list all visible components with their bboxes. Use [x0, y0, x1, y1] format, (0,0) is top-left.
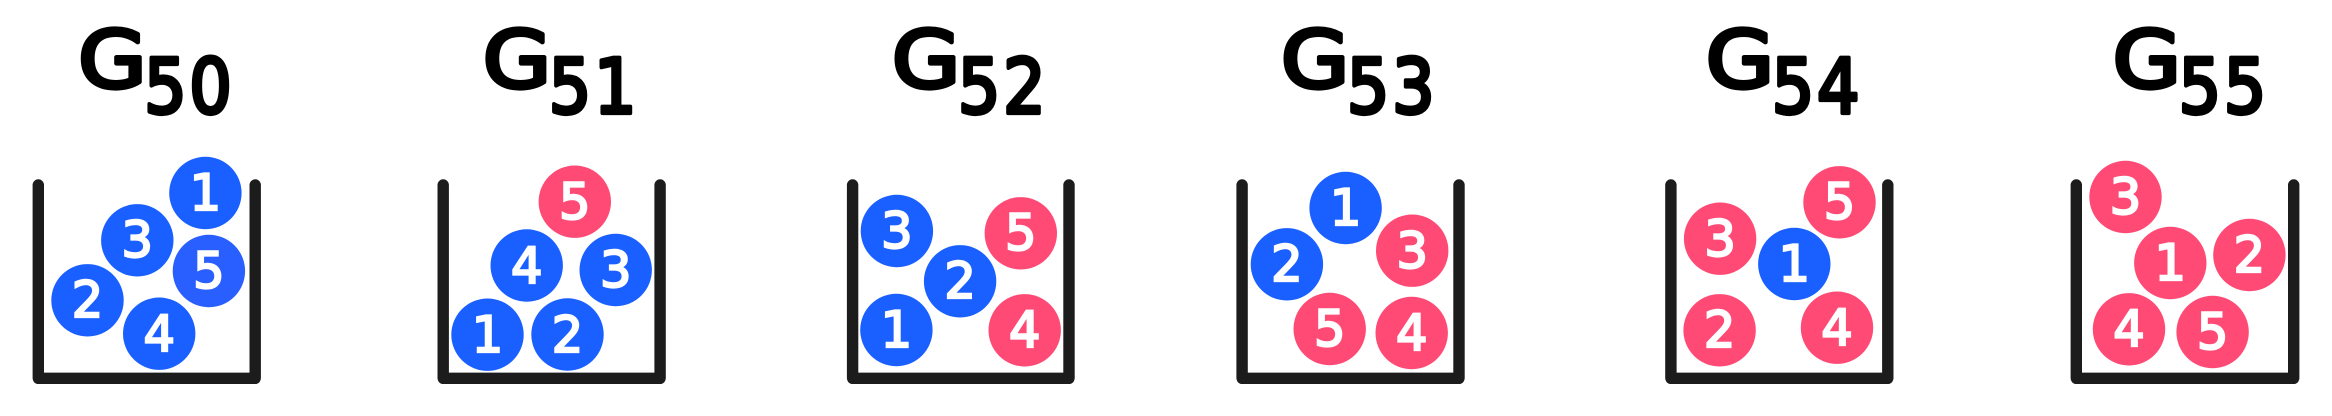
title: G53	[1281, 14, 1437, 131]
ball: blue 1	[169, 157, 242, 229]
ball: blue 1: 1	[472, 306, 503, 364]
panel: G52 group	[853, 14, 1069, 378]
ball: blue 2	[531, 298, 604, 371]
title: G55: 55	[2179, 43, 2269, 131]
ball: pink 5: 5	[559, 173, 591, 231]
panel: G53 group	[1242, 14, 1459, 378]
ball: blue 1: 1	[1330, 179, 1361, 237]
title: G51	[483, 14, 639, 131]
ball: blue 5	[173, 235, 245, 307]
ball: blue 4: 4	[511, 237, 542, 295]
ball: pink 3: 3	[2110, 168, 2141, 226]
ball: pink 1	[2134, 227, 2206, 299]
ball: blue 2	[1251, 228, 1323, 300]
ball: pink 4: 4	[1009, 301, 1040, 359]
ball: pink 3	[2089, 161, 2162, 233]
title: G52: 52	[958, 43, 1048, 131]
ball: pink 5: 5	[1824, 173, 1855, 231]
title: G50: 50	[144, 43, 234, 131]
ball: pink 2: 2	[2234, 226, 2265, 284]
ball: blue 1	[1758, 228, 1831, 300]
title: G54: G	[1706, 14, 1774, 106]
ball: blue 3	[861, 195, 933, 267]
ball: pink 5	[2176, 296, 2249, 368]
ball: pink 3	[1376, 214, 1448, 287]
ball: pink 5	[1294, 293, 1366, 365]
ball: blue 3: 3	[122, 211, 153, 269]
ball: pink 4: 4	[1821, 299, 1853, 357]
ball: blue 1	[451, 298, 524, 371]
ball: blue 1: 1	[1779, 235, 1810, 293]
bucket: G50	[38, 185, 255, 378]
ball: pink 4: 4	[1396, 304, 1427, 362]
ball: blue 4	[490, 229, 563, 302]
panel: G51 group	[443, 14, 660, 378]
ball: pink 5	[1803, 166, 1876, 238]
bucket: G52	[853, 185, 1069, 378]
ball: blue 2	[924, 245, 996, 318]
title: G54	[1706, 14, 1862, 131]
title: G54: 54	[1772, 43, 1862, 131]
ball: pink 2	[1683, 294, 1756, 366]
ball: blue 2	[51, 264, 124, 336]
ball: pink 3: 3	[1704, 210, 1736, 268]
title: G51: 51	[549, 43, 639, 131]
ball: blue 3: 3	[881, 202, 913, 260]
ball: blue 2: 2	[944, 252, 976, 310]
panel: G54 group	[1671, 14, 1888, 378]
ball: pink 5: 5	[1005, 204, 1037, 262]
ball: pink 5: 5	[1314, 300, 1345, 358]
bucket: G54	[1671, 185, 1888, 378]
ball: pink 5	[985, 197, 1057, 270]
ball: blue 3	[101, 204, 174, 276]
ball: blue 1	[1309, 172, 1382, 244]
ball: blue 4: 4	[143, 305, 175, 363]
ball: pink 4	[2093, 293, 2165, 365]
ball: pink 4: 4	[2113, 300, 2145, 358]
title: G53: 53	[1347, 43, 1437, 131]
ball: blue 3	[580, 234, 652, 306]
title: G55: G	[2113, 14, 2181, 106]
ball: pink 1: 1	[2155, 234, 2186, 292]
ball: blue 5: 5	[193, 242, 225, 300]
ball: pink 2: 2	[1704, 301, 1735, 359]
ball: blue 2: 2	[552, 306, 583, 364]
ball: pink 4	[1801, 292, 1873, 364]
ball: pink 3: 3	[1396, 222, 1428, 280]
bucket: G51	[443, 185, 660, 378]
title: G52: G	[892, 14, 960, 106]
ball: pink 5: 5	[2197, 303, 2228, 361]
ball: blue 1: 1	[190, 164, 221, 222]
title: G50: G	[78, 14, 147, 106]
ball: pink 4	[988, 294, 1061, 366]
ball: blue 1	[860, 294, 933, 366]
ball: pink 4	[1376, 297, 1448, 369]
ball: blue 2: 2	[1271, 235, 1303, 293]
bucket: G55	[2076, 185, 2294, 378]
ball: pink 2	[2213, 219, 2286, 291]
ball: blue 3: 3	[600, 241, 631, 299]
panel: G55 group	[2076, 14, 2294, 378]
title: G55	[2113, 14, 2269, 131]
ball: pink 5	[539, 166, 611, 238]
bucket: G53	[1242, 185, 1459, 378]
ball: pink 3	[1684, 202, 1756, 275]
title: G51: G	[483, 14, 551, 106]
title: G50	[78, 14, 234, 131]
panel: G50 group	[38, 14, 255, 378]
title: G53: G	[1281, 14, 1349, 106]
ball: blue 4	[123, 298, 195, 370]
ball: blue 1: 1	[881, 301, 912, 359]
ball: blue 2: 2	[72, 271, 103, 329]
title: G52	[892, 14, 1048, 131]
